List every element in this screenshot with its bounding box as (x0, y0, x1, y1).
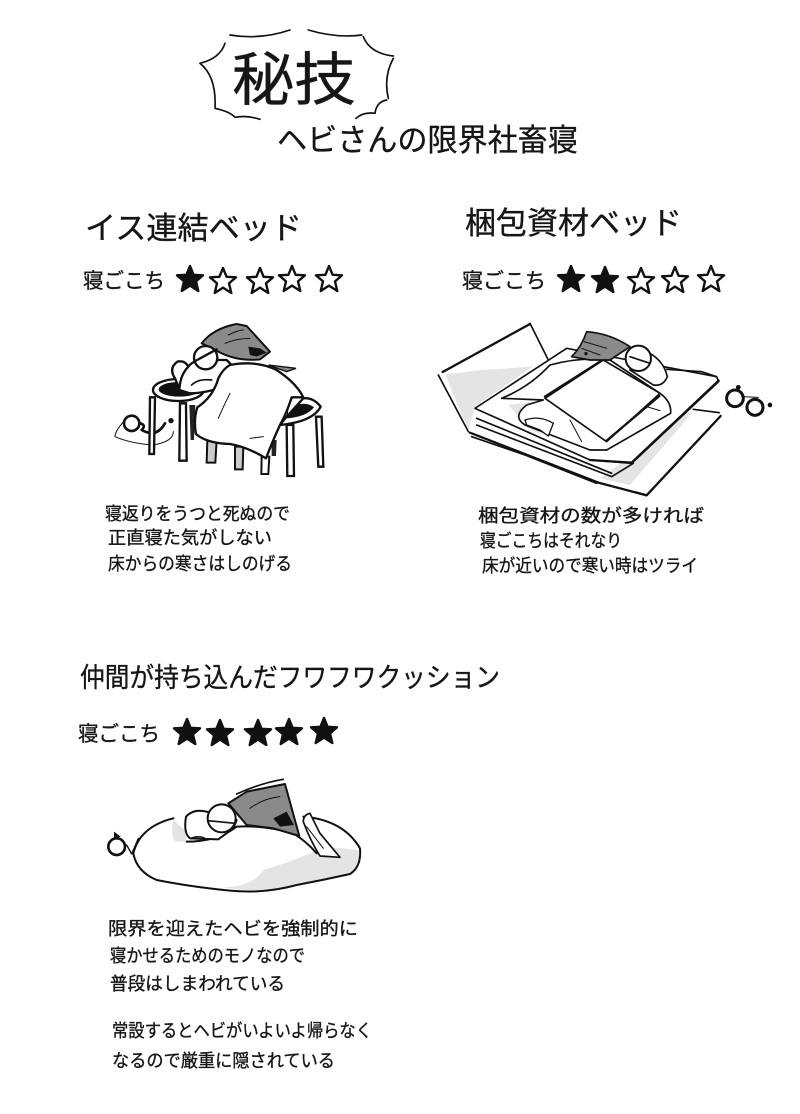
description: 梱包資材の数が多ければ (478, 506, 704, 526)
description (478, 506, 704, 576)
panel: chair bed (83, 211, 342, 574)
description: first paragraph: 限界を迎えたヘビを強制的に (108, 919, 358, 939)
rating label: 寝ごこち (83, 270, 165, 293)
description: 寝返りをうつと死ぬので (105, 504, 290, 524)
rating stars: five of five (174, 718, 337, 745)
title (200, 30, 578, 158)
rating label: 寝ごこち (78, 723, 160, 746)
description: second paragraph: なるので厳重に隠されている (112, 1051, 335, 1071)
description: 正直寝た気がしない (108, 528, 272, 548)
panel: packing material bed (438, 206, 772, 576)
heading: fluffy cushion: 仲間が持ち込んだフワフワクッション (80, 663, 500, 693)
illustration: sleeping on cushion (108, 779, 360, 892)
subtitle: ヘビさんの限界社畜寝 (277, 123, 578, 158)
description: second paragraph (112, 1021, 372, 1071)
rating stars: two of five (558, 266, 724, 293)
description: 床からの寒さはしのげる (108, 554, 292, 574)
description: first paragraph (108, 919, 358, 994)
description: 床が近いので寒い時はツライ (482, 556, 698, 576)
description (105, 504, 292, 574)
description: first paragraph: 普段はしまわれている (110, 974, 285, 994)
description: second paragraph: 常設するとヘビがいよいよ帰らなく (112, 1021, 372, 1041)
heading: packing material bed: 梱包資材ベッド (465, 206, 682, 241)
rating label: 寝ごこち (462, 270, 546, 293)
panel: fluffy cushion (78, 663, 500, 1071)
heading: chair bed: イス連結ベッド (85, 211, 302, 246)
title: secret technique: 秘技 (232, 48, 356, 113)
burst outline (200, 30, 393, 119)
description: 寝ごこちはそれなり (480, 531, 622, 551)
rating stars: one of five (177, 266, 342, 293)
illustration: sleeping on cardboard (438, 323, 772, 496)
illustration: sleeping on joined stools (115, 324, 323, 476)
description: first paragraph: 寝かせるためのモノなので (110, 946, 305, 966)
